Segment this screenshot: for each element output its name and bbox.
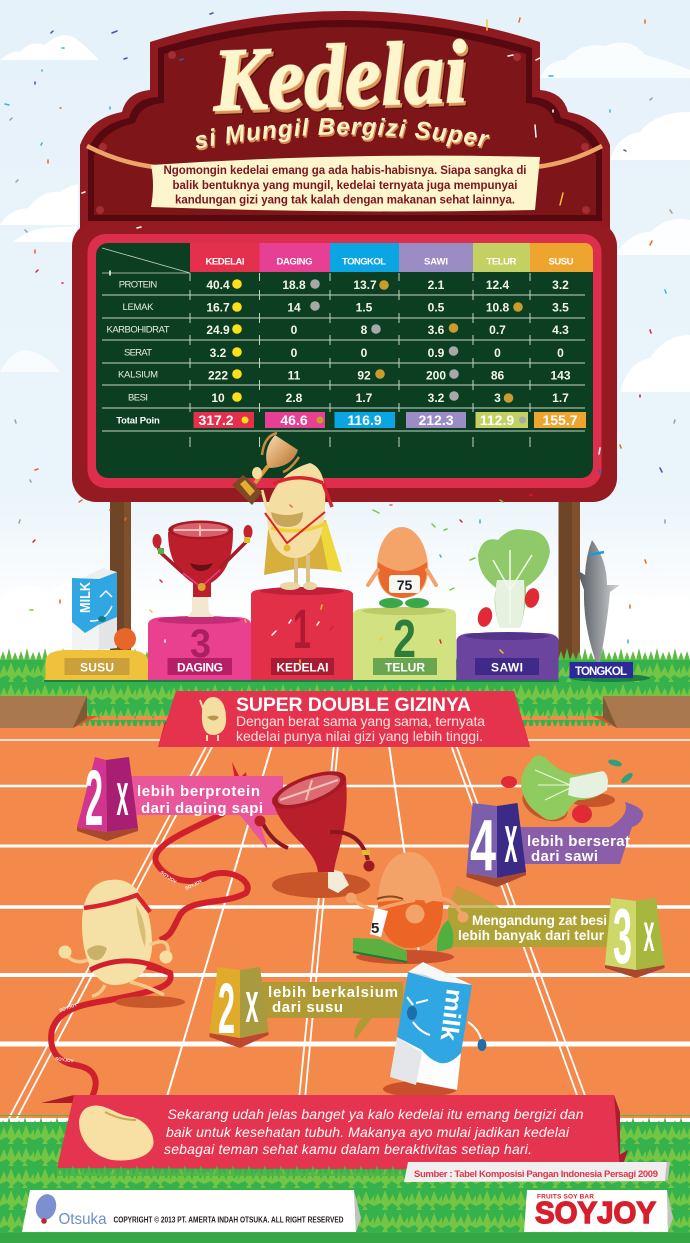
table values: 0.9 [428, 346, 445, 360]
table header: TONGKOL [342, 256, 386, 268]
table values: 3.5 [552, 300, 569, 314]
hurdle yellow: x [246, 971, 259, 1035]
medal dots [232, 279, 523, 403]
total points: 212.3 [418, 412, 454, 428]
total points: 112.9 [480, 412, 514, 428]
table values: 1.7 [552, 391, 569, 405]
table header: KEDELAI [206, 256, 244, 268]
callout: 4x serat [466, 755, 643, 887]
otsuka copyright panel [22, 1190, 361, 1232]
tongkol fish and label: TONGKOL [575, 666, 627, 678]
lettuce on podium [476, 529, 550, 628]
sky background [0, 0, 690, 720]
callout: 2x protein: dari daging sapi [141, 800, 263, 817]
ribbon: SOYJOY [184, 879, 203, 891]
closing text: baik untuk kesehatan tubuh. Makanya ayo mulai jadikan kedelai [166, 1124, 570, 1140]
egg on podium: 75 [397, 577, 412, 593]
table values: 40.4 [206, 278, 230, 292]
table values: 12.4 [486, 278, 510, 292]
hurdle lime: x [644, 903, 654, 963]
hurdle yellow [210, 967, 268, 1049]
table values: 16.7 [206, 300, 230, 314]
row labels: SERAT [124, 348, 152, 358]
table values: 8 [361, 323, 368, 337]
closing text [164, 1106, 584, 1157]
podium: telur [353, 607, 456, 680]
hurdle pink: x [116, 761, 128, 828]
callout: 2x protein [77, 753, 283, 850]
table values: 10.8 [486, 300, 510, 314]
hurdle pink: 2 [85, 753, 103, 842]
callout: 4x serat: lebih berserat [527, 833, 630, 850]
otsuka logo: Otsuka [58, 1211, 107, 1228]
table values [206, 278, 571, 405]
total points: 46.6 [280, 412, 308, 428]
signboard posts [110, 495, 580, 680]
table values: 86 [491, 368, 504, 382]
table values: 3.2 [428, 391, 445, 405]
table values: 24.9 [206, 323, 230, 337]
egg runner: 5 [371, 920, 379, 937]
row labels: KALSIUM [118, 370, 158, 380]
banner text: kedelai punya nilai gizi yang lebih tinggi. [236, 728, 483, 744]
table values: 92 [357, 368, 371, 382]
grass field lower [0, 1115, 690, 1243]
table values: 2.1 [428, 278, 445, 292]
table values: 200 [426, 368, 446, 382]
egg on podium [368, 527, 436, 608]
milk carton on podium [72, 568, 136, 650]
ribbon: SOYJOY [59, 1002, 78, 1013]
grass field upper [0, 648, 690, 718]
table header: SAWI [424, 256, 448, 268]
callout: 2x kalsium [210, 967, 403, 1049]
total points: 155.7 [542, 412, 578, 428]
intro paper: kandungan gizi yang tak kalah dengan makanan sehat lainnya. [175, 194, 515, 206]
row labels: Total Poin [116, 416, 160, 426]
table values: 0 [291, 346, 298, 360]
meat on podium [152, 520, 252, 617]
clouds [0, 35, 690, 670]
podium ground shadow [44, 680, 559, 682]
soyjoy logo panel: FRUITS SOY BAR [537, 1194, 594, 1200]
banner heading: SUPER DOUBLE GIZINYA [236, 694, 471, 716]
table values: 0 [361, 346, 368, 360]
lettuce running [501, 755, 634, 828]
soybean runner [58, 880, 185, 1008]
copyright: COPYRIGHT © 2013 PT. AMERTA INDAH OTSUKA. ALL RIGHT RESERVED [114, 1216, 344, 1224]
row labels: PROTEIN [119, 280, 157, 290]
source tag: Sumber : Tabel Komposisi Pangan Indonesia Persagi 2009 [414, 1169, 658, 1180]
table values: 3 [494, 391, 501, 405]
table values: 0 [291, 323, 298, 337]
table values: 222 [208, 368, 228, 382]
table values: 1.7 [356, 391, 373, 405]
soyjoy logo panel: SOYJOY [535, 1195, 656, 1230]
subtitle: si Mungil Bergizi Super [196, 118, 490, 150]
egg runner [346, 852, 468, 964]
milk runner [383, 962, 486, 1097]
total points: 116.9 [347, 412, 382, 428]
callout: 3x besi: lebih banyak dari telur [458, 928, 605, 943]
table values: 1.5 [356, 300, 373, 314]
banner: super double gizinya [158, 691, 530, 747]
milk runner: milk [435, 987, 468, 1043]
table values: 3.6 [428, 323, 445, 337]
table header: TELUR [486, 256, 517, 268]
callout: 4x serat: dari sawi [531, 848, 598, 865]
rank number 2: 2 [393, 609, 416, 669]
rope [87, 146, 602, 167]
confetti [5, 13, 675, 663]
icon: trophy [232, 433, 299, 505]
table header: SUSU [548, 256, 574, 268]
podium: susu [46, 650, 148, 680]
tongkol fish and label [563, 540, 650, 682]
table values: 3.2 [210, 346, 227, 360]
intro paper: balik bentuknya yang mungil, kedelai ternyata juga mempunyai [172, 180, 518, 192]
rank number 1: 1 [293, 597, 311, 660]
table values: 18.8 [282, 278, 306, 292]
title: Kedelai [210, 23, 469, 130]
brown block left [0, 696, 98, 728]
hurdle purple [466, 801, 526, 887]
otsuka logo [33, 1192, 107, 1228]
row labels: LEMAK [122, 302, 154, 313]
score board [72, 222, 617, 502]
callout: 3x besi [448, 886, 664, 980]
brown block right [592, 696, 690, 728]
podium: telur: TELUR [385, 660, 425, 674]
rank number 3: 3 [190, 622, 211, 666]
closing note panel [41, 1095, 628, 1176]
total points: 317.2 [198, 412, 234, 428]
ribbon: SOYJOY [111, 978, 130, 986]
hurdle purple: x [504, 801, 518, 877]
podium: sawi [456, 632, 558, 680]
table values: 0 [557, 346, 564, 360]
hurdle purple: 4 [470, 806, 496, 886]
hurdle yellow: 2 [218, 970, 235, 1049]
table values: 143 [550, 368, 571, 382]
table values: 0.7 [489, 323, 506, 337]
table values: 13.7 [353, 278, 377, 292]
podium: kedelai: KEDELAI [276, 660, 328, 674]
podium: susu: SUSU [80, 660, 114, 674]
podium: daging [148, 616, 251, 680]
ribbon [51, 762, 248, 1097]
ribbon: SOYJOY [159, 870, 177, 884]
table values: 14 [287, 300, 301, 314]
bean illustration [79, 1106, 154, 1160]
podium: sawi: SAWI [491, 660, 523, 674]
ribbon: SOYJOY [55, 1056, 74, 1064]
table values: 2.8 [286, 391, 303, 405]
total points [194, 412, 586, 428]
small bean icon [200, 697, 226, 741]
podium: daging: DAGING [177, 660, 223, 674]
row labels [106, 280, 170, 426]
milk carton on podium: MILK [77, 582, 94, 613]
banner text: Dengan berat sama yang sama, ternyata [236, 713, 485, 729]
table header: DAGING [276, 256, 312, 268]
table values: 10 [211, 391, 225, 405]
callout: 2x kalsium: dari susu [272, 999, 343, 1016]
table values: 0.5 [428, 300, 445, 314]
row labels: BESI [128, 392, 148, 404]
nutrition table [102, 243, 593, 447]
callout: 3x besi: Mengandung zat besi [472, 913, 607, 928]
callout: 2x kalsium: lebih berkalsium [268, 984, 398, 1001]
intro paper [151, 156, 540, 211]
closing text: sebagai teman sehat kamu dalam beraktivitas setiap hari. [164, 1141, 532, 1157]
banner text [236, 713, 485, 744]
callout: 2x protein: lebih berprotein [137, 783, 260, 800]
source tag [404, 1162, 670, 1182]
table header [102, 243, 593, 273]
running track [0, 716, 690, 1120]
podium: kedelai [251, 587, 353, 680]
table values: 3.2 [552, 278, 569, 292]
intro paper: Ngomongin kedelai emang ga ada habis-habisnya. Siapa sangka di [164, 165, 526, 177]
hurdle lime: 3 [613, 892, 632, 980]
sign crest [80, 11, 610, 229]
meat runner [254, 764, 374, 898]
closing text: Sekarang udah jelas banget ya kalo kedelai itu emang bergizi dan [168, 1106, 584, 1122]
row labels: KARBOHIDRAT [106, 324, 170, 336]
table values: 11 [288, 368, 301, 382]
table values: 4.3 [552, 323, 569, 337]
soybean winner with trophy [232, 433, 342, 590]
table values: 0 [494, 346, 501, 360]
table grid [102, 273, 585, 447]
